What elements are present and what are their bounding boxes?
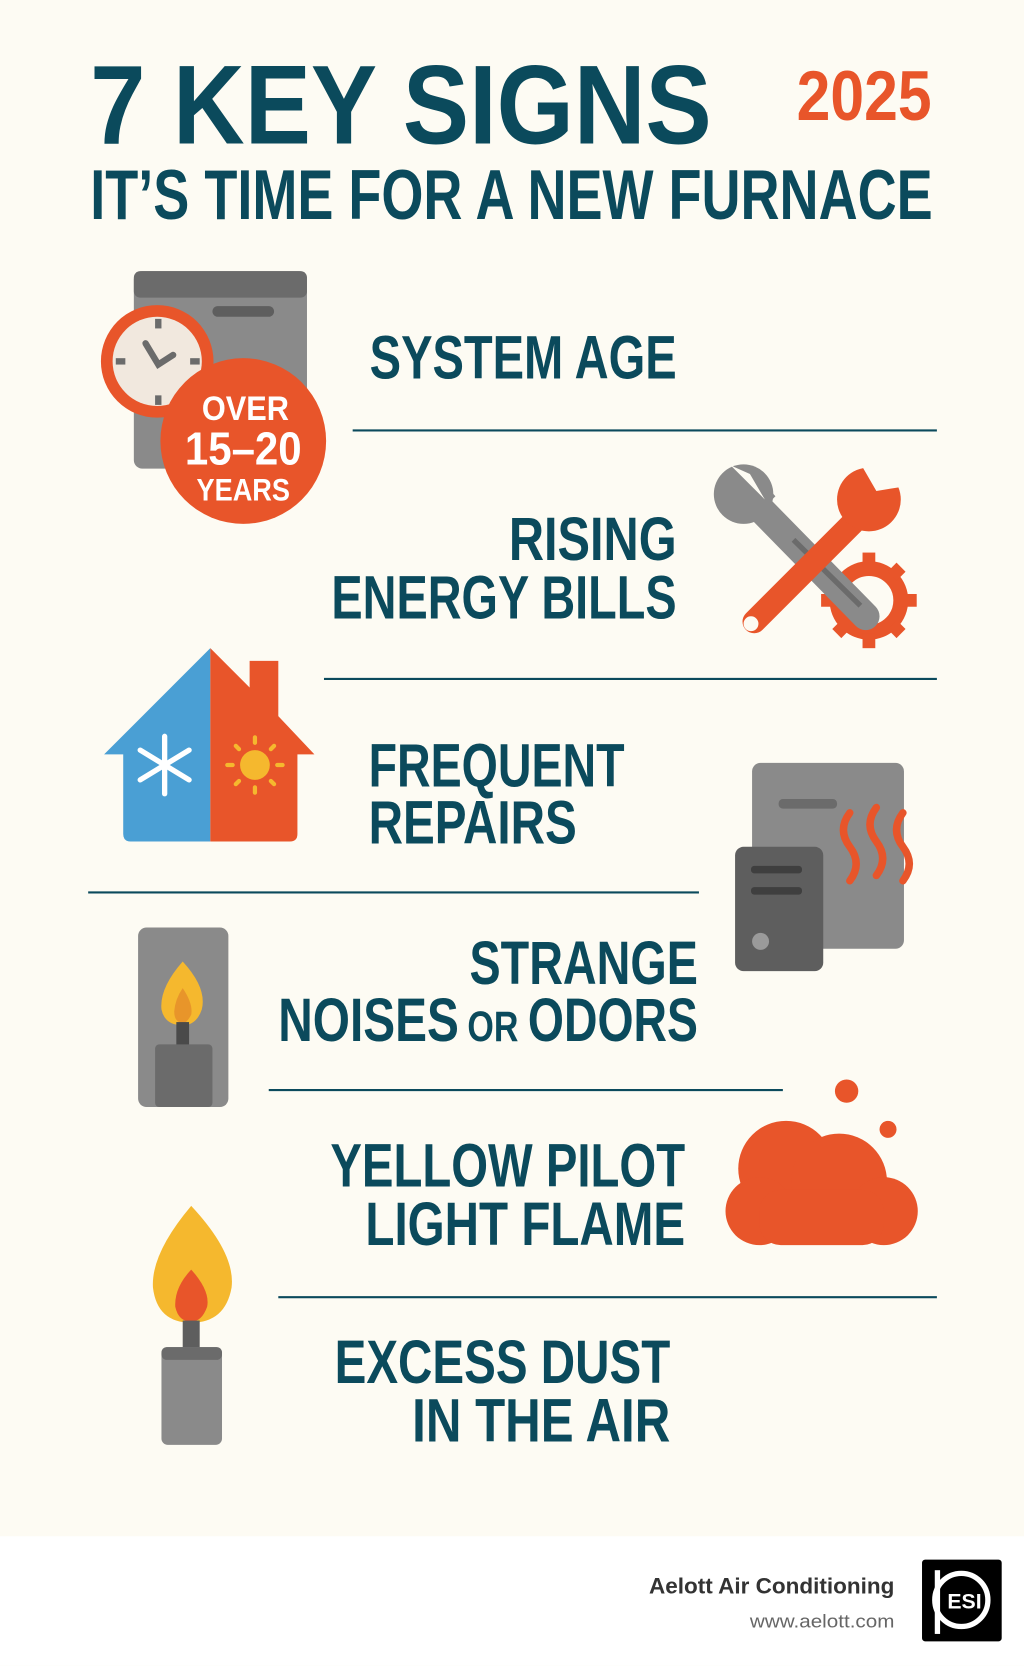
heading: frequent repairs: REPAIRS <box>369 789 577 858</box>
heading: rising energy bills <box>331 505 677 632</box>
heading: system age: SYSTEM AGE <box>370 323 677 392</box>
footer: company name and url <box>649 1574 894 1632</box>
icon: wrenches and gear <box>714 463 917 648</box>
logo <box>922 1560 1002 1641</box>
heading: yellow pilot light flame: YELLOW PILOT <box>330 1132 685 1201</box>
heading: frequent repairs: FREQUENT <box>369 731 625 800</box>
heading: strange noises or odors <box>278 929 698 1055</box>
heading: rising energy bills: ENERGY BILLS <box>331 563 677 632</box>
heading: strange noises or odors: STRANGE <box>470 929 698 998</box>
icon: candle flame <box>153 1206 232 1445</box>
icon: house heating and cooling <box>104 648 314 841</box>
footer: company name and url: www.aelott.com <box>749 1612 894 1632</box>
heading: frequent repairs <box>369 731 625 858</box>
heading: strange noises or odors: ODORS <box>528 986 698 1055</box>
title: 7 KEY SIGNS <box>90 42 712 168</box>
logo: ESI <box>947 1589 982 1613</box>
heading: excess dust in the air: IN THE AIR <box>412 1387 670 1456</box>
icon: furnace with clock and age badge: OVER <box>202 390 289 428</box>
heading: yellow pilot light flame: LIGHT FLAME <box>365 1190 685 1259</box>
heading: excess dust in the air <box>335 1328 670 1456</box>
footer: company name and url: Aelott Air Conditioning <box>649 1574 894 1599</box>
heading: rising energy bills: RISING <box>509 505 677 574</box>
icon: smoke cloud <box>726 1079 918 1245</box>
title: 2025 <box>797 57 932 135</box>
icon: furnace with clock and age badge: 15–20 <box>185 422 302 474</box>
icon: furnace with heat waves <box>735 763 909 971</box>
icon: furnace with clock and age badge: YEARS <box>197 472 290 508</box>
heading: excess dust in the air: EXCESS DUST <box>335 1328 670 1397</box>
icon: pilot burner box <box>138 928 228 1107</box>
heading: yellow pilot light flame <box>330 1132 685 1259</box>
heading: strange noises or odors: NOISES <box>278 986 459 1055</box>
icon: furnace with clock and age badge <box>101 271 326 524</box>
heading: strange noises or odors: OR <box>467 1004 518 1051</box>
